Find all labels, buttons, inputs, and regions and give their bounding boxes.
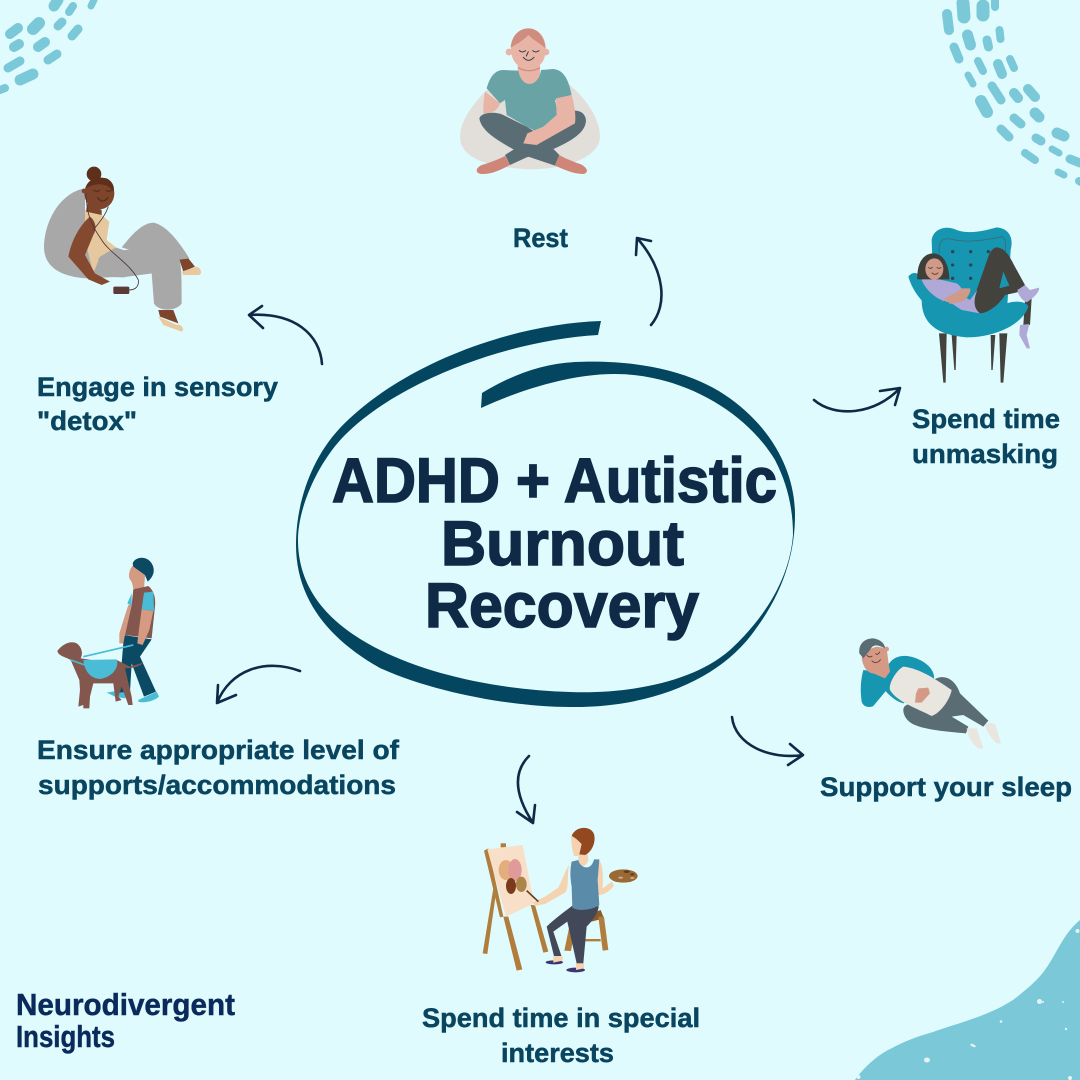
decoration: bottom-right wave — [855, 920, 1080, 1080]
label: sensory detox: "detox" — [37, 406, 137, 436]
label: unmasking: Spend time — [912, 404, 1060, 434]
arrow: to special interests — [517, 756, 535, 823]
label: special interests: interests — [501, 1038, 614, 1068]
label: unmasking — [912, 404, 1060, 469]
title: ADHD + Autistic — [332, 446, 777, 516]
arrow: to supports — [217, 666, 300, 703]
icon: person sleeping with pillow — [859, 638, 1001, 748]
decoration: top-left dashes — [0, 0, 94, 90]
label: supports: Ensure appropriate level of — [37, 735, 400, 765]
label: special interests: Spend time in special — [422, 1003, 700, 1033]
title — [332, 446, 777, 641]
icon: person walking with service dog — [57, 558, 159, 708]
icon: person lying on armchair — [908, 227, 1039, 383]
brand: Neurodivergent Insights: Neurodivergent — [16, 987, 235, 1022]
label: sleep: Support your sleep — [820, 772, 1072, 802]
icon: person listening to music on beanbag — [44, 167, 201, 332]
label: rest: Rest — [513, 223, 568, 253]
label: sensory detox — [37, 372, 278, 436]
arrow: to sleep — [732, 717, 803, 765]
arrow: to rest — [636, 238, 661, 325]
label: supports: supports/accommodations — [38, 770, 396, 800]
decoration: top-right dashes — [947, 0, 1080, 183]
label: special interests — [422, 1003, 700, 1068]
arrow: to sensory detox — [249, 306, 322, 364]
title: Recovery — [425, 571, 699, 641]
icon: person painting at easel — [483, 828, 638, 972]
title: Burnout — [441, 509, 684, 579]
label: unmasking: unmasking — [912, 439, 1058, 469]
brand: Neurodivergent Insights: Insights — [16, 1019, 115, 1054]
icon: person meditating on beanbag — [460, 28, 600, 174]
label: supports — [37, 735, 400, 800]
arrow: to unmasking — [814, 388, 900, 411]
central hand-drawn ellipse — [296, 321, 795, 707]
brand: Neurodivergent Insights — [16, 987, 235, 1054]
label: sensory detox: Engage in sensory — [37, 372, 278, 402]
